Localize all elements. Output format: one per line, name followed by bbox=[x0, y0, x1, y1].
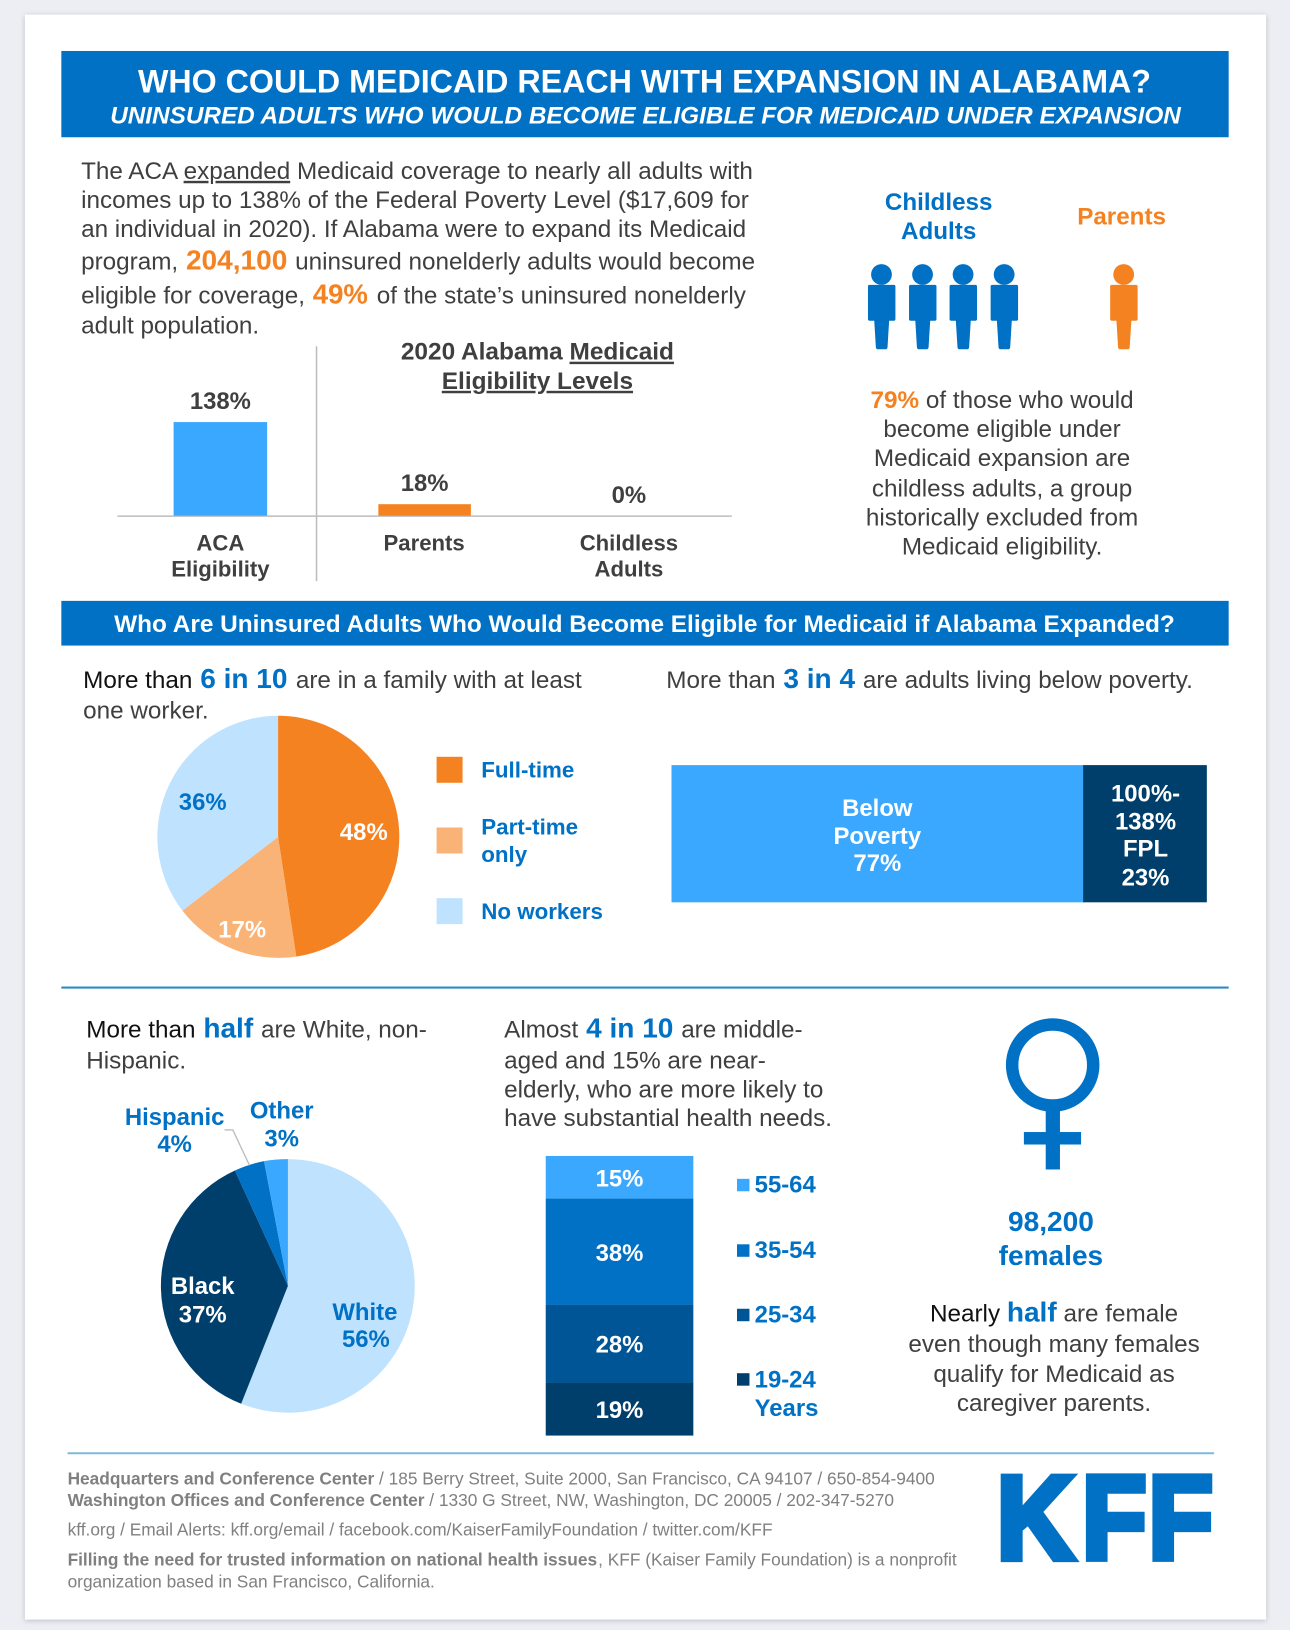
females text: qualify for Medicaid as bbox=[933, 1361, 1175, 1388]
pie chart: race: Hispanic bbox=[125, 1104, 224, 1131]
title banner bbox=[61, 51, 1229, 137]
childless adults label bbox=[885, 189, 992, 245]
childless adults text: Medicaid eligibility. bbox=[902, 534, 1102, 561]
childless adults label: Adults bbox=[901, 218, 976, 245]
subtitle: UNINSURED ADULTS WHO WOULD BECOME ELIGIBLE FOR MEDICAID UNDER EXPANSION bbox=[110, 103, 1181, 130]
females count bbox=[999, 1206, 1103, 1271]
footer text: Headquarters and Conference Center / 185 Berry Street, Suite 2000, San Francisco, CA 94107 / 650-854-9400 bbox=[68, 1468, 935, 1488]
poverty text: More than 3 in 4 are adults living below poverty. bbox=[666, 663, 1193, 694]
pie chart: race: 37% bbox=[179, 1301, 227, 1328]
age legend: 55-64 bbox=[755, 1171, 816, 1198]
footer text: kff.org / Email Alerts: kff.org/email / facebook.com/KaiserFamilyFoundation / twitter.com/KFF bbox=[68, 1519, 773, 1539]
section banner: Who Are Uninsured Adults Who Would Become Eligible for Medicaid if Alabama Expanded? bbox=[114, 611, 1175, 638]
bar: ACA eligibility: ACA bbox=[196, 530, 244, 555]
pie chart: race bbox=[125, 1098, 415, 1413]
age legend: 25-34 bbox=[755, 1301, 816, 1328]
pie chart: race: 4% bbox=[157, 1131, 192, 1158]
pie chart: race: Black bbox=[171, 1273, 235, 1300]
poverty stacked bar: 100%- bbox=[1111, 780, 1180, 807]
section banner bbox=[61, 601, 1229, 646]
intro paragraph: eligible for coverage, 49% of the state’s uninsured nonelderly bbox=[81, 279, 747, 310]
females text: even though many females bbox=[908, 1331, 1200, 1358]
footer text: Filling the need for trusted information on national health issues, KFF (Kaiser Family Foundation) is a nonprofit bbox=[68, 1550, 957, 1570]
pie chart: race: White bbox=[332, 1299, 397, 1326]
bar: childless adults: 0% bbox=[612, 482, 646, 509]
title: WHO COULD MEDICAID REACH WITH EXPANSION IN ALABAMA? bbox=[138, 64, 1151, 100]
intro paragraph: an individual in 2020). If Alabama were to expand its Medicaid bbox=[81, 216, 746, 243]
poverty stacked bar: 77% bbox=[853, 850, 901, 877]
age text: Almost 4 in 10 are middle- bbox=[504, 1012, 803, 1043]
childless adults text: childless adults, a group bbox=[872, 475, 1132, 502]
age legend: Years bbox=[755, 1395, 818, 1422]
pie legend: Part-time bbox=[481, 815, 578, 840]
poverty stacked bar: Below bbox=[842, 795, 913, 822]
childless adults text: 79% of those who would bbox=[871, 387, 1134, 414]
age stacked bar: 28% bbox=[596, 1331, 643, 1358]
race text: Hispanic. bbox=[86, 1048, 186, 1075]
pie chart: race: Other bbox=[250, 1098, 314, 1125]
females text: caregiver parents. bbox=[957, 1390, 1151, 1417]
pie chart: race: 56% bbox=[342, 1326, 390, 1353]
eligibility bar chart bbox=[117, 339, 732, 581]
bar: ACA eligibility: 138% bbox=[190, 388, 251, 415]
intro paragraph bbox=[81, 158, 755, 340]
childless adults text bbox=[866, 387, 1138, 561]
age legend bbox=[737, 1171, 818, 1422]
age stacked bar: 15% bbox=[596, 1166, 643, 1193]
KFF logo: F bbox=[1149, 1453, 1213, 1584]
pie legend bbox=[437, 757, 603, 924]
icons: childless adults bbox=[868, 264, 1018, 349]
bar: parents: 18% bbox=[401, 470, 449, 497]
worker text: one worker. bbox=[83, 697, 209, 724]
females count: females bbox=[999, 1240, 1103, 1271]
chart title bbox=[401, 339, 674, 395]
icon: female symbol bbox=[1012, 1024, 1093, 1169]
KFF logo: K bbox=[997, 1453, 1074, 1584]
pie chart: workers: 48% bbox=[340, 819, 388, 846]
childless adults text: historically excluded from bbox=[866, 505, 1138, 532]
females text: Nearly half are female bbox=[930, 1297, 1178, 1328]
intro paragraph: program, 204,100 uninsured nonelderly adults would become bbox=[81, 244, 755, 275]
age stacked bar bbox=[546, 1156, 693, 1436]
pie legend: No workers bbox=[481, 899, 603, 924]
females count: 98,200 bbox=[1008, 1206, 1094, 1237]
age text: have substantial health needs. bbox=[504, 1105, 832, 1132]
females text bbox=[908, 1297, 1200, 1417]
pie legend: Full-time bbox=[481, 758, 574, 783]
chart title: 2020 Alabama Medicaid bbox=[401, 339, 674, 366]
KFF logo: F bbox=[1082, 1453, 1146, 1584]
worker text: More than 6 in 10 are in a family with at least bbox=[83, 663, 582, 694]
intro paragraph: The ACA expanded Medicaid coverage to nearly all adults with bbox=[81, 158, 753, 185]
parents label: Parents bbox=[1077, 204, 1166, 231]
poverty stacked bar bbox=[672, 765, 1207, 902]
age text: elderly, who are more likely to bbox=[504, 1077, 823, 1104]
intro paragraph: incomes up to 138% of the Federal Poverty Level ($17,609 for bbox=[81, 187, 749, 214]
pie chart: workers: 36% bbox=[179, 789, 227, 816]
poverty stacked bar: Poverty bbox=[833, 823, 922, 850]
KFF logo bbox=[997, 1453, 1213, 1584]
chart title: Eligibility Levels bbox=[442, 368, 633, 395]
poverty stacked bar: 138% bbox=[1115, 809, 1176, 836]
childless adults text: Medicaid expansion are bbox=[874, 445, 1130, 472]
race text: More than half are White, non- bbox=[86, 1012, 427, 1043]
childless adults text: become eligible under bbox=[883, 416, 1121, 443]
bar: parents: Parents bbox=[384, 530, 465, 555]
age stacked bar: 38% bbox=[596, 1240, 643, 1267]
pie chart: race: 3% bbox=[264, 1126, 299, 1153]
poverty stacked bar: 23% bbox=[1122, 865, 1169, 892]
footer text: Washington Offices and Conference Center / 1330 G Street, NW, Washington, DC 20005 / 202-347-5270 bbox=[68, 1490, 894, 1510]
age legend: 35-54 bbox=[755, 1237, 816, 1264]
footer text: organization based in San Francisco, California. bbox=[68, 1571, 435, 1591]
childless adults label: Childless bbox=[885, 189, 992, 216]
bar: childless adults bbox=[580, 482, 678, 581]
pie chart: workers bbox=[157, 716, 399, 958]
age stacked bar: 19% bbox=[596, 1397, 643, 1424]
icon: parent bbox=[1110, 264, 1138, 349]
race text bbox=[86, 1012, 427, 1075]
age text: aged and 15% are near- bbox=[504, 1048, 766, 1075]
pie chart: workers: 17% bbox=[218, 917, 266, 944]
intro paragraph: adult population. bbox=[81, 313, 259, 340]
worker text bbox=[83, 663, 582, 724]
poverty stacked bar: FPL bbox=[1123, 836, 1168, 863]
bar: parents bbox=[378, 470, 471, 555]
age text bbox=[504, 1012, 832, 1132]
age legend: 19-24 bbox=[755, 1367, 816, 1394]
bar: childless adults: Childless bbox=[580, 530, 678, 555]
bar: childless adults: Adults bbox=[594, 556, 663, 581]
pie legend: only bbox=[481, 842, 528, 867]
bar: ACA eligibility bbox=[171, 388, 270, 581]
footer text bbox=[68, 1468, 957, 1591]
bar: ACA eligibility: Eligibility bbox=[171, 556, 270, 581]
